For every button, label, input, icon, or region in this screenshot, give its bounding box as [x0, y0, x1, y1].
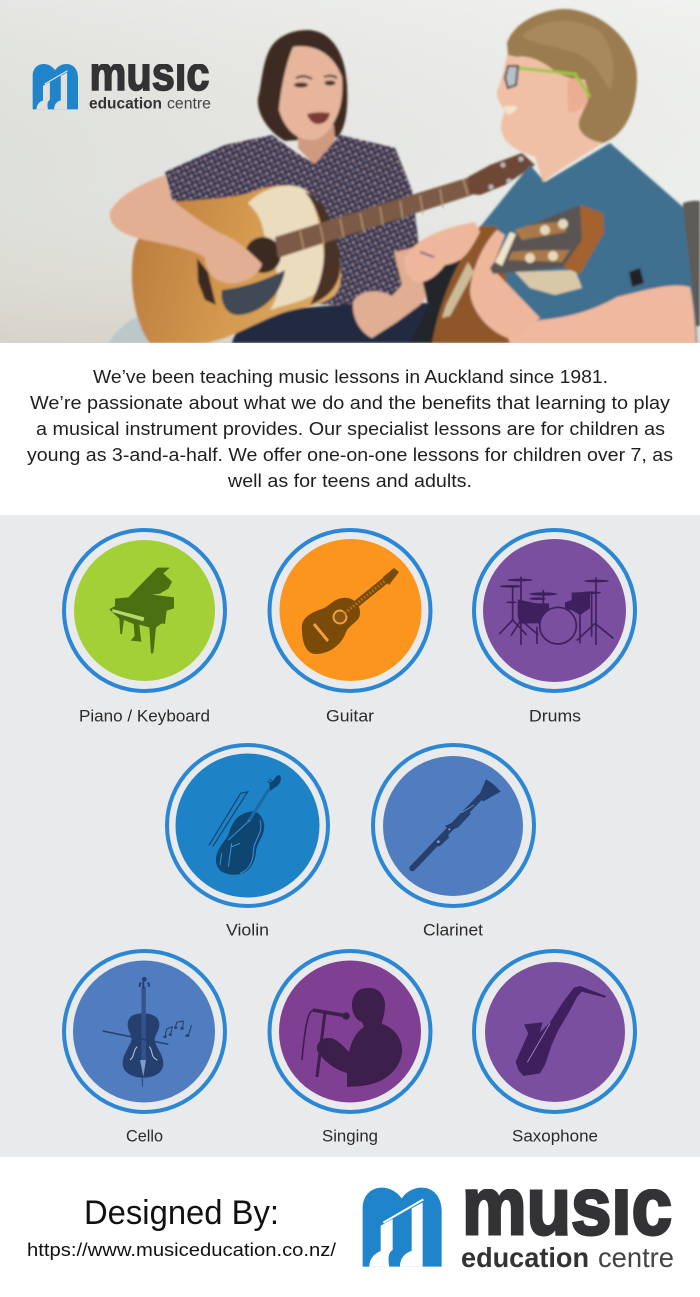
intro text block: We’re passionate about what we do and the benefits that learning to play [30, 392, 671, 413]
instrument: piano / keyboard [64, 530, 225, 726]
boy glasses [518, 68, 590, 97]
intro text block: We’ve been teaching music lessons in Auckland since 1981. [93, 366, 608, 387]
instrument: violin [167, 745, 328, 940]
guitar cream sheen [248, 185, 324, 310]
dark gap [410, 258, 462, 343]
instrument: singing [270, 951, 430, 1146]
intro text block: young as 3-and-a-half. We offer one-on-one lessons for children over 7, as [27, 444, 673, 465]
logo wordmark [85, 44, 215, 113]
logo wordmark: centre [167, 96, 211, 113]
label: Cello [126, 1128, 163, 1146]
boy smile [504, 106, 517, 115]
logo wordmark: music [462, 1161, 672, 1252]
logo icon [363, 1188, 442, 1267]
sound hole [245, 237, 281, 273]
boy picking hand [405, 222, 480, 282]
logo icon [33, 64, 78, 109]
icon: singer with microphone [302, 988, 402, 1087]
label: Violin [226, 922, 269, 940]
headstock [468, 153, 535, 195]
bridge rosette [197, 258, 216, 305]
icon: saxophone [516, 986, 606, 1076]
label: Clarinet [423, 922, 483, 940]
instrument: clarinet [373, 745, 534, 940]
intro text block: a musical instrument provides. Our specialist lessons are for children as [36, 418, 665, 439]
website url: https://www.musiceducation.co.nz/ [27, 1240, 336, 1260]
label: Guitar [326, 708, 375, 726]
icon: guitar [302, 568, 399, 654]
neck [275, 177, 472, 258]
logo wordmark: music [90, 48, 210, 101]
heading: Designed By: [84, 1194, 279, 1232]
teacher hair [258, 30, 347, 141]
intro text block [27, 366, 673, 491]
boy guitar headstock [489, 204, 584, 276]
teacher jeans [232, 300, 440, 343]
icon: clarinet [412, 779, 501, 868]
teacher left arm [110, 175, 262, 283]
logo wordmark: centre [598, 1242, 674, 1273]
boy ear [567, 78, 588, 112]
icon: cello with music notes [103, 977, 192, 1087]
panel: instruments [0, 515, 700, 1157]
boy shirt [480, 143, 697, 343]
hero photo: teacher and student playing guitars [0, 0, 700, 343]
instrument: saxophone [474, 951, 635, 1146]
pickguard [222, 270, 285, 315]
label: Singing [322, 1128, 378, 1146]
boy fretting hand [470, 230, 540, 340]
icon: piano [109, 568, 174, 653]
boy neck and face [497, 53, 603, 182]
guitar side [305, 192, 340, 305]
boy forearm [506, 285, 696, 343]
boy shirt tag [629, 268, 644, 287]
icon: violin and bow [209, 776, 280, 875]
instrument: cello [64, 951, 225, 1146]
instrument: guitar [270, 530, 430, 726]
intro text block: well as for teens and adults. [227, 470, 472, 491]
icon: drum kit [499, 577, 613, 645]
boy guitar tuners [515, 270, 582, 295]
footer credit [27, 1194, 336, 1260]
label: Saxophone [512, 1128, 598, 1146]
footer logo [363, 1158, 680, 1273]
top logo [33, 44, 215, 113]
teacher right arm [353, 248, 432, 338]
teacher shirt [165, 135, 422, 305]
teacher neck [298, 125, 336, 166]
sofa [683, 201, 700, 326]
boy hair [507, 9, 637, 143]
logo wordmark: education [89, 96, 162, 113]
logo wordmark: education [461, 1242, 589, 1273]
boy guitar body [432, 226, 514, 343]
teacher face [279, 46, 342, 140]
instrument: drums [474, 530, 635, 726]
guitar body [132, 186, 341, 343]
label: Drums [529, 708, 581, 726]
label: Piano / Keyboard [79, 708, 210, 726]
